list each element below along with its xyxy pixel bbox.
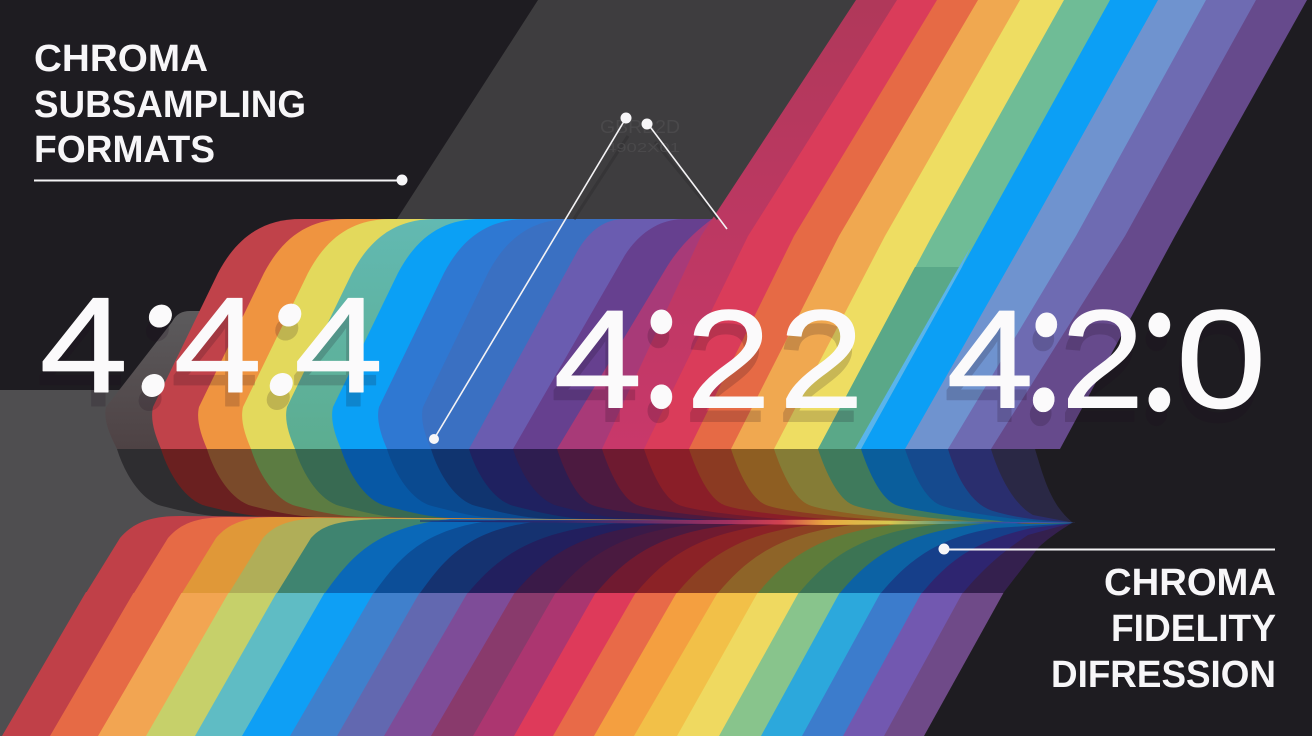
panel: dark reflection bands (117, 449, 1312, 523)
label: 4:2:2: 2 (686, 281, 771, 438)
panel: diagonal rainbow stripes, upper right (602, 0, 1312, 449)
stripe: light blue sliver (855, 248, 970, 449)
stripe: violet (948, 0, 1312, 449)
stripe: yellow (774, 0, 1312, 449)
panel: rounded rainbow bands, upper left (105, 219, 1312, 449)
label: 4:2:2: : (636, 223, 687, 451)
band: slate blue (422, 219, 1312, 449)
convergence line (420, 520, 1073, 525)
stripe: light orange (731, 0, 1312, 449)
panel: lower mirrored curved bands (86, 516, 1075, 593)
band: purple (513, 219, 1312, 449)
label: 4:2:2: 2 (779, 281, 864, 438)
band: blue (378, 219, 1312, 449)
label: 4:4:4 (40, 225, 383, 436)
label: 4:4:4: : (249, 225, 327, 435)
leader line: title rule (34, 174, 408, 186)
label: 4:2:2: 4 (554, 281, 642, 437)
label: 4:2:0: 0 (1176, 282, 1266, 438)
stripe: darker green lower section (818, 267, 959, 449)
band: sky blue (332, 219, 1312, 449)
right dark background edge (1060, 0, 1312, 449)
heading: chroma fidelity difression: FIDELITY (1111, 608, 1276, 650)
label: 4:2:0 (946, 226, 1266, 454)
heading: chroma fidelity difression: DIFRESSION (1051, 654, 1276, 696)
band: violet (469, 219, 1312, 449)
label: 4:4:4: 4 (294, 269, 383, 421)
heading: chroma fidelity difression: CHROMA (1104, 562, 1276, 604)
label: 4:2:2 (554, 223, 864, 451)
heading: chroma subsampling formats (34, 38, 306, 171)
stripe: orange (689, 0, 1312, 449)
band: yellow (242, 219, 1312, 449)
heading: chroma fidelity difression (1051, 562, 1276, 696)
stripe: green (818, 0, 1312, 449)
band: teal green (286, 219, 1312, 449)
faint ghost label: 4902X01 (606, 140, 680, 155)
label: 4:2:0: : (1134, 226, 1185, 454)
leader line: 4:2:2 to top (429, 112, 632, 444)
label: 4:4:4: 4 (40, 270, 128, 421)
faint ghost label (600, 117, 680, 155)
heading: chroma subsampling formats: CHROMA (34, 38, 208, 80)
stripe: purple (991, 0, 1312, 449)
stripe: sky blue (861, 0, 1312, 449)
leader line: top to stripes (642, 118, 727, 229)
heading: chroma subsampling formats: FORMATS (34, 129, 215, 171)
right dark background, lower (924, 522, 1312, 736)
heading: chroma subsampling formats: SUBSAMPLING (34, 84, 306, 126)
faint ghost label: GBRB2D (600, 117, 680, 137)
leader line: lower right (938, 544, 1275, 554)
band: purple magenta (557, 219, 1312, 449)
band: grey (105, 311, 1312, 449)
label: 4:4:4: 4 (174, 270, 262, 421)
label: 4:2:0: 2 (1061, 281, 1144, 437)
stripe: light blue (905, 0, 1312, 449)
stripe: magenta (602, 0, 1312, 449)
band: red (152, 219, 1312, 449)
band: orange (198, 219, 1312, 449)
upper grey parallelogram (395, 0, 860, 240)
stripe: red (644, 0, 1312, 449)
lower-left grey panel (0, 390, 300, 736)
faint shadow lines behind leaders (574, 136, 718, 219)
label: 4:2:0: : (1017, 226, 1075, 454)
panel: lower bright diagonal stripes (2, 592, 1312, 736)
label: 4:2:0: 4 (946, 281, 1034, 438)
label: 4:4:4: : (122, 225, 197, 436)
